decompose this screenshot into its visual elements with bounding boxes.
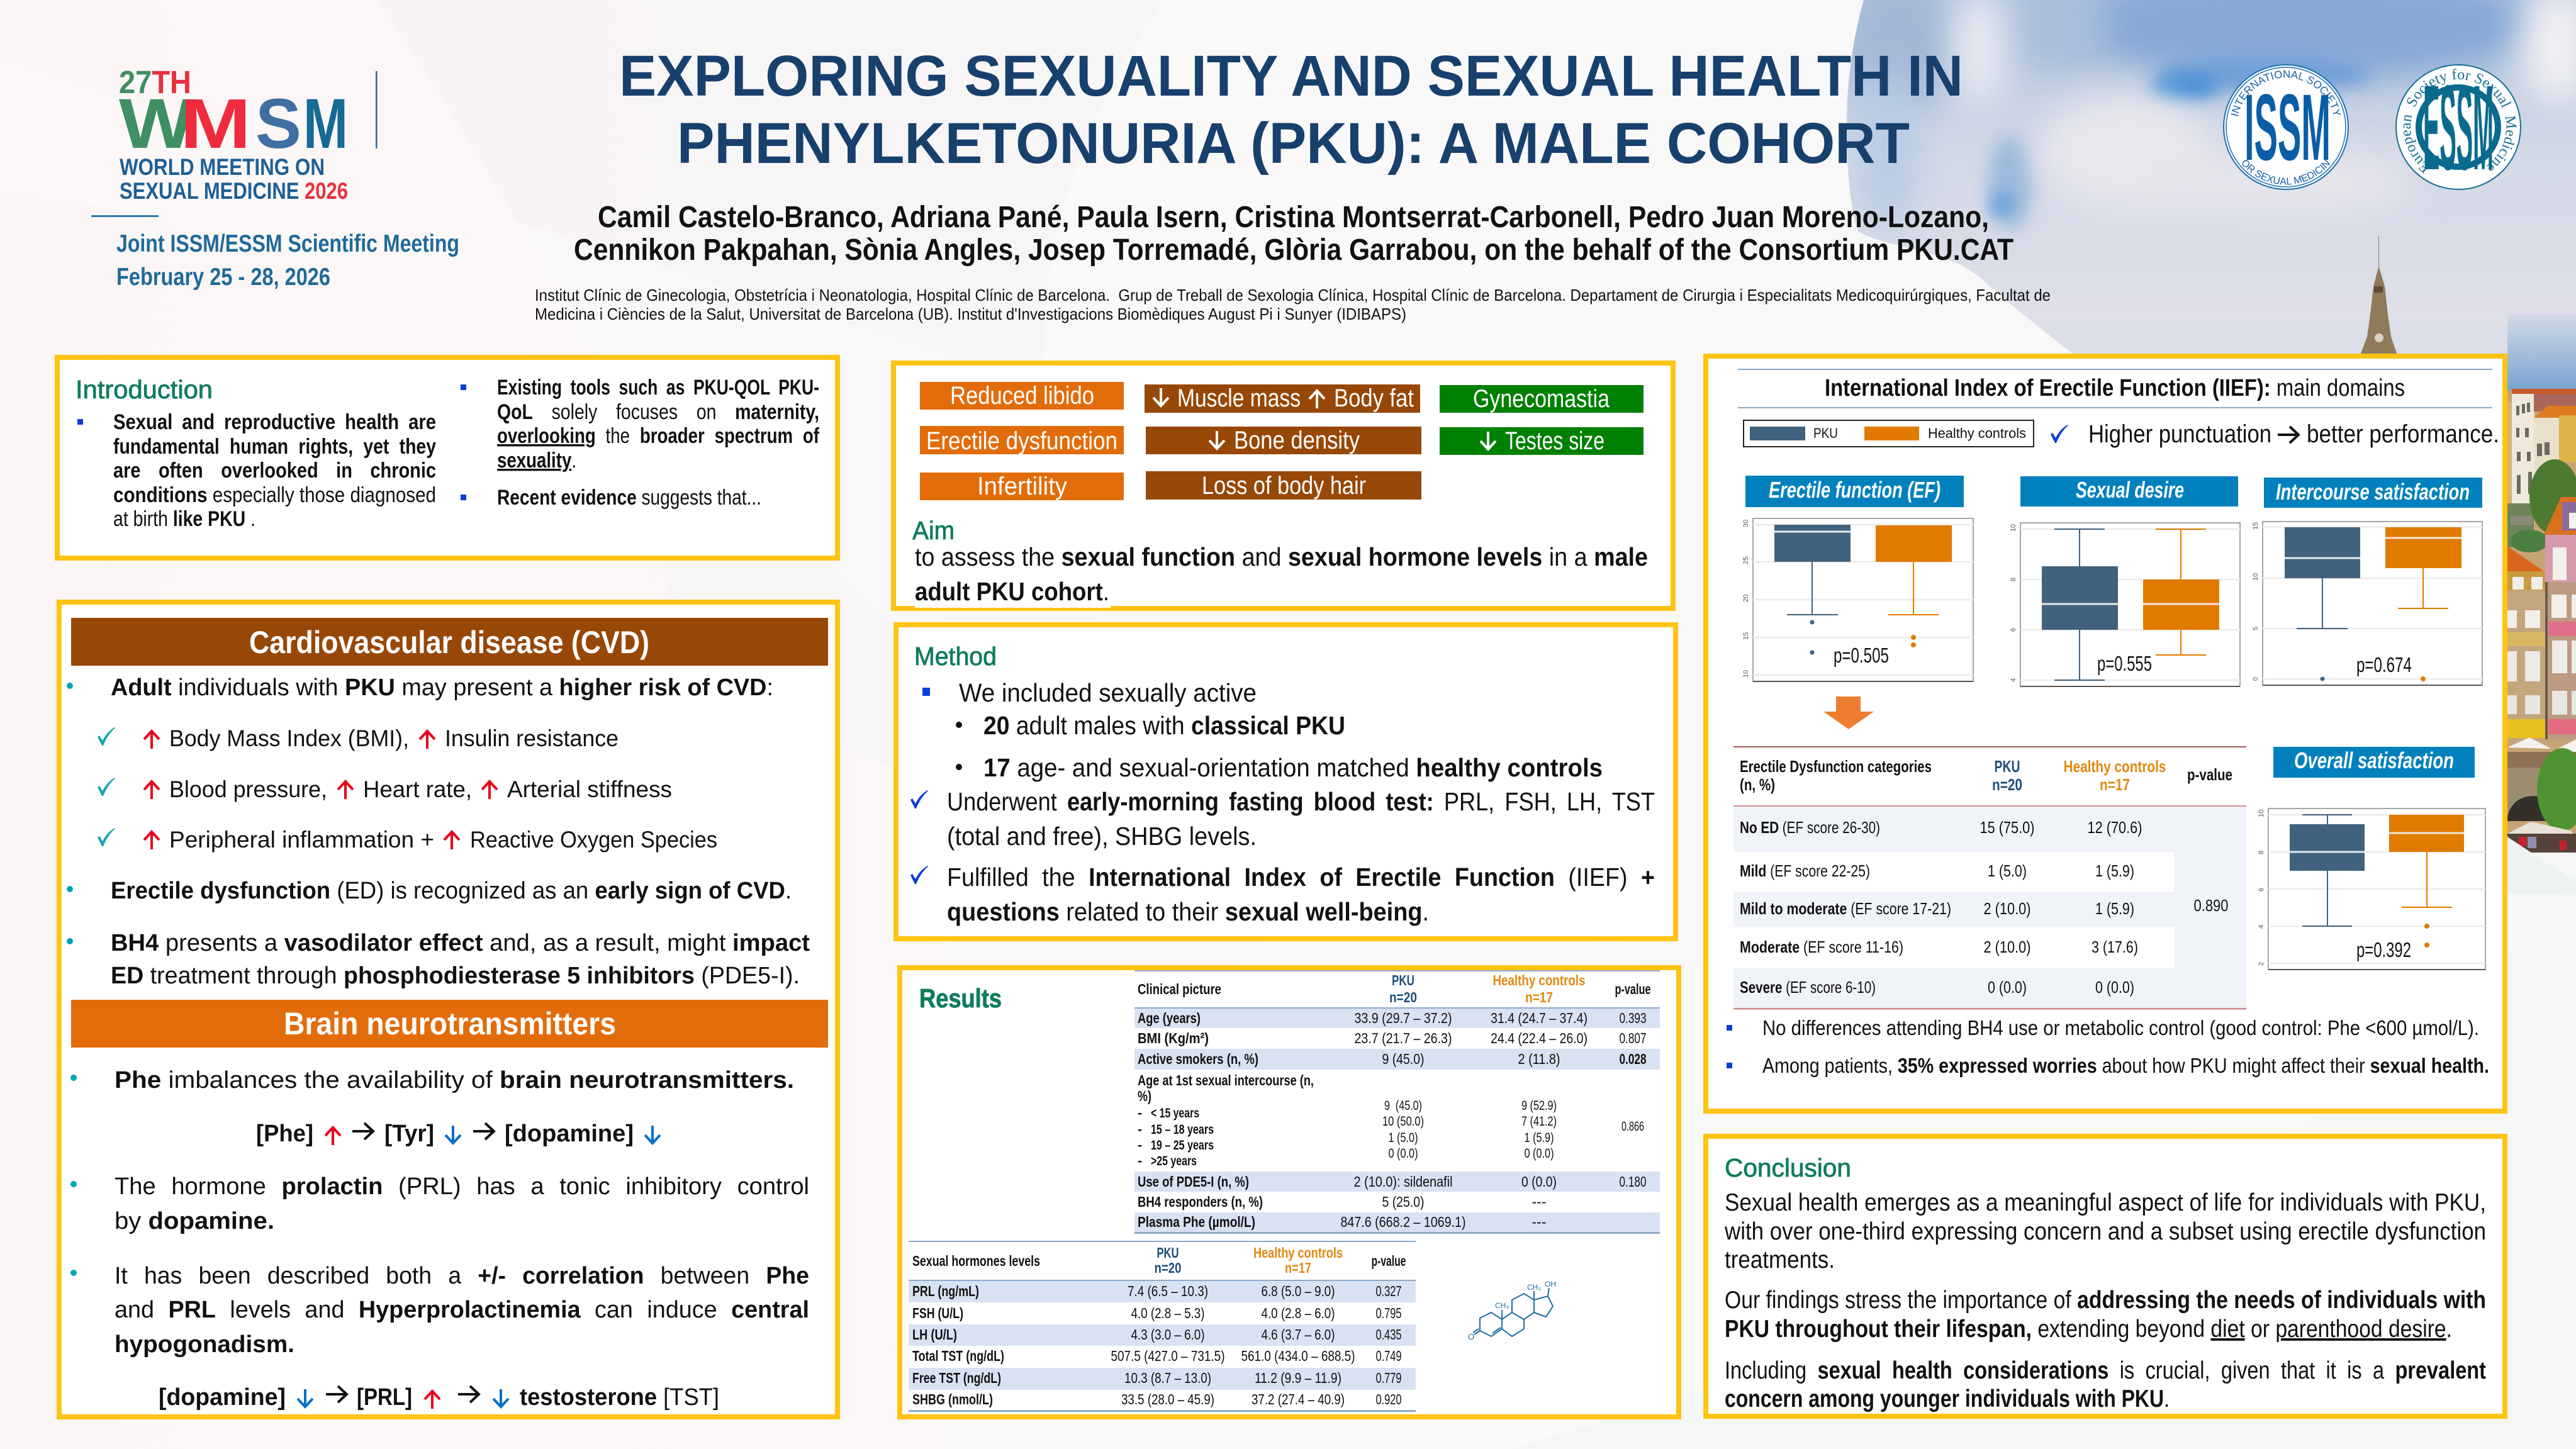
text: intro left column <box>77 410 436 531</box>
table: clinical picture: 0.866 <box>1621 1119 1644 1134</box>
text: participants: We included sexually active <box>959 678 1257 707</box>
table: sexual hormones: 7.4 (6.5 – 10.3) <box>1128 1283 1208 1299</box>
buildings photograph <box>2507 389 2576 893</box>
table: sexual hormones: 6.8 (5.0 – 9.0) <box>1261 1283 1335 1299</box>
table: erectile dysfunction categories: (n, %) <box>1740 775 1775 794</box>
text: first paragraph: Sexual health emerges as a meaningful aspect of life for individuals with PKU, <box>1725 1189 2486 1216</box>
table: clinical picture: %) <box>1138 1088 1151 1104</box>
table: sexual hormones: LH (U/L) <box>912 1326 957 1343</box>
table: clinical picture: < 15 years <box>1151 1106 1199 1121</box>
text: participants: 17 age- and sexual-orientation matched healthy controls <box>983 753 1603 782</box>
icon: testosterone molecule: CH₃ <box>1495 1301 1509 1310</box>
logo: ISSM <box>2223 64 2349 190</box>
heading: cardiovascular disease: Cardiovascular disease (CVD) <box>249 625 649 660</box>
heading: introduction: Introduction <box>76 375 213 404</box>
text: ED and BH4: BH4 presents a vasodilator effect and, as a result, might impact <box>111 930 810 956</box>
table: clinical picture: Clinical picture <box>1138 981 1221 997</box>
label: sexual desire <box>2020 476 2238 506</box>
table: sexual hormones: n=20 <box>1154 1260 1182 1276</box>
text: ED and BH4 <box>111 878 810 989</box>
table: sexual hormones: 4.0 (2.8 – 6.0) <box>1261 1305 1335 1321</box>
table: clinical picture: - <box>1138 1138 1142 1153</box>
text: intro right column: QoL solely focuses on maternity, <box>497 400 819 424</box>
table: clinical picture: Healthy controls <box>1492 972 1586 988</box>
table: clinical picture: 33.9 (29.7 – 37.2) <box>1354 1010 1452 1026</box>
heading: conclusion: Conclusion <box>1725 1153 1851 1182</box>
table: erectile dysfunction categories: 1 (5.0) <box>1988 861 2027 880</box>
table: clinical picture: >25 years <box>1151 1154 1197 1168</box>
table: clinical picture: BMI (Kg/m²) <box>1138 1030 1209 1046</box>
text: blood test: Underwent early-morning fasting blood test: PRL, FSH, LH, TST <box>947 787 1655 816</box>
table: sexual hormones: Healthy controls <box>1253 1245 1343 1261</box>
table: sexual hormones: PRL (ng/mL) <box>912 1283 979 1299</box>
conference logo: 27th WMSM: Joint ISSM/ESSM Scientific Meeting <box>116 230 459 257</box>
table: clinical picture: - <box>1138 1154 1142 1168</box>
table: erectile dysfunction categories: PKU <box>1995 757 2020 776</box>
authors: Cennikon Pakpahan, Sònia Angles, Josep Torremadé, Glòria Garrabou, on the behalf of the Consortium PKU.CAT <box>574 233 2013 267</box>
box plot: sexual desire <box>2010 523 2240 686</box>
table: sexual hormones: 4.3 (3.0 – 6.0) <box>1131 1326 1204 1343</box>
risk factors with up arrows: Blood pressure, <box>169 776 327 802</box>
panel: method <box>896 625 1676 939</box>
table: erectile dysfunction categories: 0.890 <box>2193 896 2229 915</box>
table: sexual hormones: Free TST (ng/dL) <box>912 1370 1001 1386</box>
table: erectile dysfunction categories: Erectile Dysfunction categories <box>1740 757 1932 776</box>
risk factors with up arrows: Arterial stiffness <box>507 776 672 802</box>
table: sexual hormones: 10.3 (8.7 – 13.0) <box>1124 1370 1211 1386</box>
text: first paragraph: with over one-third expressing concern and a subset using erectile dysfunction <box>1724 1218 2486 1245</box>
heading: brain neurotransmitters: Brain neurotransmitters <box>284 1006 616 1041</box>
text: CVD risk: Adult individuals with PKU may present a higher risk of CVD: <box>111 674 773 701</box>
box plot: erectile function: 20 <box>1742 595 1750 602</box>
table: erectile dysfunction categories: 0 (0.0) <box>1988 978 2027 997</box>
table: sexual hormones: SHBG (nmol/L) <box>912 1391 993 1407</box>
table: sexual hormones: 0.920 <box>1375 1391 1402 1407</box>
box plot: overall satisfaction: 8 <box>2258 851 2265 854</box>
icon: testosterone molecule: O <box>1468 1332 1474 1341</box>
text: findings: Among patients, 35% expressed worries about how PKU might affect their sexual health. <box>1762 1054 2489 1077</box>
box plot: intercourse satisfaction: 10 <box>2252 573 2260 581</box>
box plot: erectile function <box>1742 518 1973 681</box>
table: clinical picture: 9 (45.0) <box>1382 1051 1425 1067</box>
table: clinical picture: 847.6 (668.2 – 1069.1) <box>1340 1214 1466 1230</box>
table: clinical picture: --- <box>1532 1194 1546 1210</box>
box plot: sexual desire: 10 <box>2010 524 2017 532</box>
box plot: overall satisfaction: 2 <box>2258 962 2265 966</box>
authors: Camil Castelo-Branco, Adriana Pané, Paula Isern, Cristina Montserrat-Carbonell, Pedro Juan Moreno-Lozano, <box>598 201 1989 234</box>
table: clinical picture: Active smokers (n, %) <box>1138 1051 1258 1067</box>
text: correlation: hypogonadism. <box>115 1331 294 1358</box>
title: PHENYLKETONURIA (PKU): A MALE COHORT <box>677 111 1910 176</box>
table: erectile dysfunction categories: n=20 <box>1992 775 2022 794</box>
table: sexual hormones: 4.6 (3.7 – 6.0) <box>1261 1326 1335 1343</box>
heading: aim: Aim <box>912 516 955 545</box>
text: second paragraph: Our findings stress the importance of addressing the needs of individuals with <box>1725 1287 2486 1314</box>
title <box>619 44 1963 176</box>
table: clinical picture: 0 (0.0) <box>1521 1173 1557 1190</box>
table: clinical picture: 24.4 (22.4 – 26.0) <box>1491 1030 1588 1046</box>
text: second paragraph <box>1725 1287 2486 1343</box>
tags: orange symptoms: Reduced libido <box>950 382 1094 410</box>
box plot: erectile function: 15 <box>1742 632 1750 640</box>
table: erectile dysfunction categories: Healthy controls <box>2064 757 2166 776</box>
panel: IIEF <box>1706 356 2505 1111</box>
text: participants: 20 adult males with classical PKU <box>983 711 1345 740</box>
icon: testosterone molecule: OH <box>1545 1280 1556 1289</box>
tags: green symptoms: Testes size <box>1505 427 1604 455</box>
table: clinical picture: 0 (0.0) <box>1388 1146 1418 1161</box>
box plot: sexual desire: 8 <box>2010 578 2017 581</box>
tags: green symptoms <box>1440 385 1644 455</box>
note: higher punctuation <box>2051 420 2499 448</box>
table: erectile dysfunction categories: No ED (EF score 26-30) <box>1740 818 1880 837</box>
arrow: to ED categories <box>1823 697 1874 729</box>
table: clinical picture: n=20 <box>1389 989 1417 1005</box>
note: higher punctuation: better performance. <box>2307 420 2499 448</box>
risk factors with up arrows: Body Mass Index (BMI), <box>169 725 409 751</box>
table: sexual hormones: 37.2 (27.4 – 40.9) <box>1252 1391 1345 1407</box>
table: clinical picture: 9 (52.9) <box>1521 1099 1557 1113</box>
text: correlation: It has been described both a +/- correlation between Phe <box>115 1263 809 1289</box>
bullets: brain list <box>70 1075 77 1276</box>
box plot: intercourse satisfaction: 5 <box>2252 627 2260 630</box>
conference logo: 27th WMSM: S <box>255 84 301 163</box>
conference logo: 27th WMSM: SEXUAL MEDICINE 2026 <box>120 178 348 204</box>
table: clinical picture: Plasma Phe (µmol/L) <box>1138 1214 1255 1230</box>
label: overall satisfaction <box>2273 747 2475 778</box>
box plot: erectile function: p=0.505 <box>1834 644 1889 667</box>
table: clinical picture: 19 – 25 years <box>1151 1138 1214 1153</box>
text: first paragraph <box>1724 1189 2486 1273</box>
text: intro right column: overlooking the broader spectrum of <box>497 424 820 448</box>
table: clinical picture: PKU <box>1392 972 1414 988</box>
label: erectile function <box>1745 476 1964 507</box>
conference logo: 27th WMSM: M <box>303 84 348 163</box>
text: ED and BH4: Erectile dysfunction (ED) is recognized as an early sign of CVD. <box>111 878 792 904</box>
pathway: Phe Tyr dopamine <box>256 1121 660 1147</box>
text: third paragraph: Including sexual health considerations is crucial, given that it is a prevalent <box>1725 1357 2486 1384</box>
table: sexual hormones: 561.0 (434.0 – 688.5) <box>1241 1348 1355 1364</box>
table: sexual hormones: FSH (U/L) <box>912 1305 963 1321</box>
bullets: CVD list <box>67 683 115 944</box>
text: findings <box>1727 1016 2489 1077</box>
table: clinical picture: 0.180 <box>1620 1173 1646 1190</box>
text: questionnaire: Fulfilled the International Index of Erectile Function (IIEF) + <box>947 863 1655 892</box>
pathway: dopamine PRL testosterone: [PRL] <box>357 1384 412 1411</box>
pathway: Phe Tyr dopamine: [Tyr] <box>384 1121 434 1147</box>
title: EXPLORING SEXUALITY AND SEXUAL HEALTH IN <box>619 44 1963 108</box>
heading: cardiovascular disease <box>71 618 828 666</box>
table: clinical picture: 0.393 <box>1620 1010 1646 1026</box>
table: clinical picture: - <box>1138 1106 1142 1121</box>
table: erectile dysfunction categories: Mild to moderate (EF score 17-21) <box>1740 899 1951 918</box>
table: clinical picture: Age at 1st sexual intercourse (n, <box>1138 1072 1314 1088</box>
text: findings: No differences attending BH4 use or metabolic control (good control: Phe <600 µmol/L). <box>1762 1016 2479 1039</box>
box plot: intercourse satisfaction <box>2252 522 2482 685</box>
table: erectile dysfunction categories: 15 (75.0) <box>1980 818 2035 837</box>
heading: IIEF main domains: International Index of Erectile Function (IIEF): main domains <box>1825 375 2405 401</box>
table: clinical picture: 2 (11.8) <box>1518 1051 1560 1067</box>
table: clinical picture: --- <box>1532 1214 1546 1230</box>
tags: brown symptoms: Loss of body hair <box>1202 472 1366 500</box>
conference logo: 27th WMSM: 27TH <box>119 64 191 100</box>
table: sexual hormones: PKU <box>1156 1245 1179 1261</box>
text: prolactin: The hormone prolactin (PRL) has a tonic inhibitory control <box>115 1173 809 1200</box>
risk factors with up arrows: Heart rate, <box>363 776 472 802</box>
box plot: intercourse satisfaction: p=0.674 <box>2356 653 2412 676</box>
conference logo: 27th WMSM: February 25 - 28, 2026 <box>116 264 330 291</box>
text: intro right column: Recent evidence suggests that... <box>497 486 761 510</box>
text: Phe imbalance: Phe imbalances the availability of brain neurotransmitters. <box>115 1067 794 1094</box>
text: intro left column: at birth like PKU . <box>113 507 255 531</box>
table: sexual hormones: 0.749 <box>1375 1348 1402 1364</box>
text: intro left column: fundamental human rights, yet they <box>113 435 436 459</box>
tags: brown symptoms: Muscle mass <box>1177 384 1301 412</box>
table: clinical picture: p-value <box>1615 981 1651 997</box>
table: sexual hormones: n=17 <box>1285 1260 1311 1276</box>
table: erectile dysfunction categories <box>1733 746 2246 1009</box>
table: sexual hormones: 0.779 <box>1375 1370 1402 1386</box>
table: erectile dysfunction categories: 12 (70.6) <box>2088 818 2142 837</box>
table: sexual hormones: Total TST (ng/dL) <box>912 1348 1004 1364</box>
panel: introduction <box>57 357 837 558</box>
table: clinical picture: 31.4 (24.7 – 37.4) <box>1491 1010 1588 1026</box>
table: clinical picture: 1 (5.0) <box>1388 1131 1418 1145</box>
table: clinical picture: 23.7 (21.7 – 26.3) <box>1354 1030 1452 1046</box>
text: ISSM <box>2244 74 2331 180</box>
box plot: sexual desire: p=0.555 <box>2097 652 2152 675</box>
text: prolactin: by dopamine. <box>115 1208 274 1234</box>
table: clinical picture: 10 (50.0) <box>1382 1114 1424 1129</box>
table: erectile dysfunction categories: Moderate (EF score 11-16) <box>1740 937 1903 956</box>
label: intercourse satisfaction <box>2264 478 2482 508</box>
table: clinical picture: 5 (25.0) <box>1382 1194 1425 1210</box>
pathway: Phe Tyr dopamine: [dopamine] <box>505 1121 634 1147</box>
legend: PKU <box>1813 425 1838 441</box>
table: clinical picture: - <box>1138 1122 1142 1137</box>
pathway: dopamine PRL testosterone: testosterone [TST] <box>520 1384 719 1411</box>
table: erectile dysfunction categories: 0 (0.0) <box>2095 978 2134 997</box>
icon: testosterone molecule: CH₃ <box>1527 1283 1541 1292</box>
table: clinical picture: 0.807 <box>1620 1030 1646 1046</box>
label: overall satisfaction: Overall satisfaction <box>2294 747 2454 773</box>
table: sexual hormones: 11.2 (9.9 – 11.9) <box>1255 1370 1341 1386</box>
table: clinical picture: 9 (45.0) <box>1384 1099 1422 1113</box>
clock tower <box>2359 236 2399 359</box>
text: intro right column: Existing tools such as PKU-QOL PKU- <box>497 376 819 400</box>
table: clinical picture: 0 (0.0) <box>1524 1146 1554 1161</box>
table: sexual hormones: 4.0 (2.8 – 5.3) <box>1131 1305 1204 1321</box>
table: sexual hormones: Sexual hormones levels <box>912 1253 1040 1269</box>
table: erectile dysfunction categories: 1 (5.9) <box>2095 899 2134 918</box>
table: sexual hormones <box>909 1241 1416 1412</box>
risk factors with up arrows <box>144 725 717 853</box>
legend: Healthy controls <box>1928 425 2026 441</box>
box plot: erectile function: 10 <box>1742 670 1750 678</box>
table: clinical picture <box>1134 970 1660 1234</box>
table: erectile dysfunction categories: Severe (EF score 6-10) <box>1740 978 1876 997</box>
affiliations: Medicina i Ciències de la Salut, Universitat de Barcelona (UB). Institut d'Investigacions Biomèdiques August Pi i Sunyer (IDIBAPS) <box>535 305 1406 323</box>
box plot: sexual desire: 4 <box>2010 678 2017 682</box>
box plot: overall satisfaction: 4 <box>2258 925 2265 929</box>
box plot: overall satisfaction: 6 <box>2258 888 2265 892</box>
text: second paragraph: PKU throughout their lifespan, extending beyond diet or parenthood desire. <box>1725 1316 2452 1343</box>
table: erectile dysfunction categories: 1 (5.9) <box>2095 861 2134 880</box>
text: aim <box>915 542 1648 606</box>
affiliations: Institut Clínic de Ginecologia, Obstetrícia i Neonatologia, Hospital Clínic de Barcelona. Grup de Treball de Sexologia Clínica, Hospital Clínic de Barcelona. Departament de Cirurgia i Especialitats Medicoquirúrgiques, Facultat de <box>535 286 2051 305</box>
tags: orange symptoms: Erectile dysfunction <box>926 427 1117 455</box>
table: clinical picture: Use of PDE5-I (n, %) <box>1138 1173 1249 1190</box>
table: clinical picture: 1 (5.9) <box>1524 1131 1554 1145</box>
table: sexual hormones: 0.327 <box>1375 1283 1402 1299</box>
table: sexual hormones: 507.5 (427.0 – 731.5) <box>1111 1348 1224 1364</box>
table: sexual hormones: 0.435 <box>1375 1326 1402 1343</box>
tags: brown symptoms: Body fat <box>1334 384 1414 412</box>
label: intercourse satisfaction: Intercourse satisfaction <box>2276 479 2470 505</box>
table: erectile dysfunction categories: 2 (10.0) <box>1983 937 2031 956</box>
tags: orange symptoms <box>920 382 1124 500</box>
table: sexual hormones: p-value <box>1372 1253 1406 1269</box>
text: correlation <box>115 1263 809 1358</box>
table: erectile dysfunction categories: p-value <box>2187 765 2232 784</box>
text: intro left column: are often overlooked in chronic <box>113 459 436 483</box>
box plot: overall satisfaction <box>2258 808 2485 970</box>
table: clinical picture: 2 (10.0): sildenafil <box>1354 1173 1452 1190</box>
tags: green symptoms: Gynecomastia <box>1473 385 1610 413</box>
table: clinical picture: 7 (41.2) <box>1521 1114 1557 1129</box>
table: clinical picture: BH4 responders (n, %) <box>1138 1194 1263 1210</box>
table: erectile dysfunction categories: Mild (EF score 22-25) <box>1740 861 1870 880</box>
tags: brown symptoms <box>1145 384 1421 500</box>
heading: results: Results <box>919 983 1002 1013</box>
text: aim: to assess the sexual function and sexual hormone levels in a male <box>915 542 1648 571</box>
text: prolactin <box>115 1173 809 1234</box>
table: clinical picture: Age (years) <box>1138 1010 1201 1026</box>
text: ED and BH4: ED treatment through phosphodiesterase 5 inhibitors (PDE5-I). <box>111 963 800 989</box>
box plot: intercourse satisfaction: 0 <box>2252 677 2260 681</box>
text: intro left column: Sexual and reproductive health are <box>113 410 436 434</box>
label: sexual desire: Sexual desire <box>2076 477 2184 503</box>
table: clinical picture: n=17 <box>1525 989 1553 1005</box>
box plot: sexual desire: 6 <box>2010 628 2017 632</box>
text: questionnaire <box>910 863 1655 926</box>
pathway: Phe Tyr dopamine: [Phe] <box>256 1121 313 1147</box>
text: intro left column: conditions especially those diagnosed <box>113 483 436 507</box>
table: erectile dysfunction categories: n=17 <box>2100 775 2130 794</box>
box plot: erectile function: 30 <box>1742 520 1750 527</box>
risk factors with up arrows: Peripheral inflammation + <box>169 827 434 853</box>
text: third paragraph <box>1725 1357 2486 1413</box>
box plot: intercourse satisfaction: 15 <box>2252 522 2260 530</box>
text: questionnaire: questions related to their sexual well-being. <box>947 897 1429 926</box>
risk factors with up arrows: Reactive Oxygen Species <box>470 827 717 853</box>
text: aim: adult PKU cohort. <box>915 577 1109 606</box>
text: participants <box>922 678 1603 782</box>
box plot: erectile function: 25 <box>1742 557 1750 564</box>
affiliations <box>535 286 2051 323</box>
conference logo: 27th WMSM: WORLD MEETING ON <box>120 154 325 180</box>
pathway: dopamine PRL testosterone: [dopamine] <box>159 1384 286 1411</box>
panel: results <box>900 968 1679 1417</box>
panel: cardiovascular disease and brain neurotransmitters <box>59 602 837 1417</box>
tags: orange symptoms: Infertility <box>977 473 1067 500</box>
legend <box>1744 420 2034 447</box>
table: erectile dysfunction categories: 3 (17.6) <box>2092 937 2138 956</box>
logo: ESSM: European Society for Sexual Medicine <box>2404 69 2517 174</box>
box plot: overall satisfaction: p=0.392 <box>2356 938 2411 961</box>
table: sexual hormones: 33.5 (28.0 – 45.9) <box>1121 1391 1214 1407</box>
text: blood test: (total and free), SHBG levels. <box>947 822 1257 851</box>
text: blood test <box>910 787 1655 851</box>
heading: method: Method <box>914 642 997 671</box>
pathway: dopamine PRL testosterone <box>159 1384 719 1411</box>
conference logo: 27th WMSM: W <box>119 84 194 163</box>
table: sexual hormones: 0.795 <box>1375 1305 1402 1321</box>
panel: conclusion <box>1706 1136 2505 1416</box>
box plot: overall satisfaction: 10 <box>2258 810 2265 817</box>
text: intro right column: sexuality. <box>497 449 576 473</box>
text: correlation: and PRL levels and Hyperprolactinemia can induce central <box>115 1297 809 1323</box>
risk factors with up arrows: Insulin resistance <box>445 725 619 751</box>
heading: brain neurotransmitters <box>71 1000 828 1048</box>
conference logo: 27th WMSM: M <box>180 84 251 163</box>
table: clinical picture: 15 – 18 years <box>1151 1122 1214 1137</box>
text: intro right column <box>461 376 820 510</box>
text: first paragraph: treatments. <box>1725 1246 1835 1273</box>
table: clinical picture: 0.028 <box>1620 1051 1647 1067</box>
icon: testosterone molecule <box>1468 1280 1556 1341</box>
panel: symptoms and aim <box>893 363 1673 608</box>
text: third paragraph: concern among younger individuals with PKU. <box>1725 1385 2170 1413</box>
conference logo: 27th WMSM <box>91 64 459 291</box>
label: erectile function: Erectile function (EF) <box>1769 477 1940 503</box>
logo: ISSM: INTERNATIONAL SOCIETY <box>2231 70 2341 116</box>
authors <box>574 201 2013 267</box>
sky photograph <box>1847 0 2576 390</box>
tags: brown symptoms: Bone density <box>1234 427 1360 454</box>
table: erectile dysfunction categories: 2 (10.0) <box>1983 899 2031 918</box>
note: higher punctuation: Higher punctuation <box>2088 420 2271 448</box>
